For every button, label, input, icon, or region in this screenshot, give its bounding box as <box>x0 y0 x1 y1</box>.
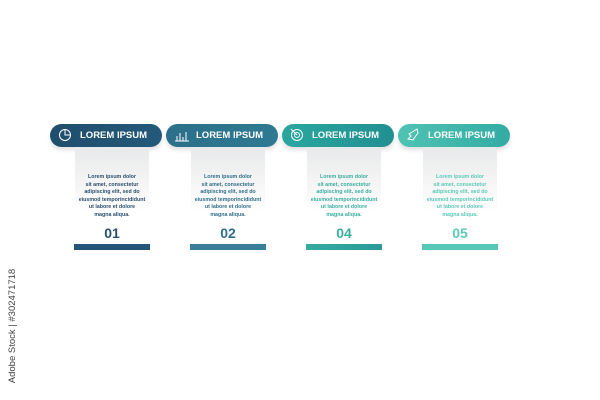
panel 3 <box>307 147 381 213</box>
text 1: ut labore et dolore <box>89 204 135 210</box>
text 1: Lorem ipsum dolor <box>88 174 136 180</box>
number 04: 04 <box>336 225 352 241</box>
text 2: magna aliqua. <box>210 212 246 218</box>
text 2: adipiscing elit, sed do <box>200 189 256 195</box>
header pill 2 <box>166 124 278 147</box>
bar 3 <box>306 244 382 250</box>
column 3 <box>281 124 395 250</box>
text 2: Lorem ipsum dolor <box>204 174 252 180</box>
bar 2 <box>190 244 266 250</box>
column 4 <box>397 124 511 250</box>
text 3: sit amet, consectetur <box>318 182 370 188</box>
panel 1 <box>75 147 149 213</box>
header pill 2: LOREM IPSUM <box>196 130 263 141</box>
header pill 3: LOREM IPSUM <box>312 130 379 141</box>
text 4: ut labore et dolore <box>437 204 483 210</box>
text 3: adipiscing elit, sed do <box>316 189 372 195</box>
text 4: adipiscing elit, sed do <box>432 189 488 195</box>
text 4: magna aliqua. <box>442 212 478 218</box>
text 2: ut labore et dolore <box>205 204 251 210</box>
header pill 4 <box>398 124 510 147</box>
text 3: Lorem ipsum dolor <box>320 174 368 180</box>
text 1 <box>79 174 146 218</box>
text 3: ut labore et dolore <box>321 204 367 210</box>
panel 2 <box>191 147 265 213</box>
text 4: Lorem ipsum dolor <box>436 174 484 180</box>
watermark id: Adobe Stock | #302471718 <box>7 269 18 383</box>
text 2: eiusmod temporincididunt <box>195 197 261 203</box>
panel 4 <box>423 147 497 213</box>
column 2 <box>165 124 279 250</box>
number 01: 01 <box>104 225 120 241</box>
bar 1 <box>74 244 150 250</box>
header pill 1: LOREM IPSUM <box>80 130 147 141</box>
text 1: adipiscing elit, sed do <box>84 189 140 195</box>
header pill 4: LOREM IPSUM <box>428 130 495 141</box>
text 3 <box>311 174 378 218</box>
header pill 1 <box>50 124 162 147</box>
bar 4 <box>422 244 498 250</box>
number 02: 02 <box>220 225 236 241</box>
text 3: magna aliqua. <box>326 212 362 218</box>
text 4 <box>427 174 494 218</box>
text 1: eiusmod temporincididunt <box>79 197 145 203</box>
header pill 3 <box>282 124 394 147</box>
text 4: eiusmod temporincididunt <box>427 197 493 203</box>
text 4: sit amet, consectetur <box>434 182 486 188</box>
text 3: eiusmod temporincididunt <box>311 197 377 203</box>
text 2: sit amet, consectetur <box>202 182 254 188</box>
number 05: 05 <box>452 225 468 241</box>
column 1 <box>49 124 163 250</box>
text 1: sit amet, consectetur <box>86 182 138 188</box>
text 2 <box>195 174 262 218</box>
text 1: magna aliqua. <box>94 212 130 218</box>
